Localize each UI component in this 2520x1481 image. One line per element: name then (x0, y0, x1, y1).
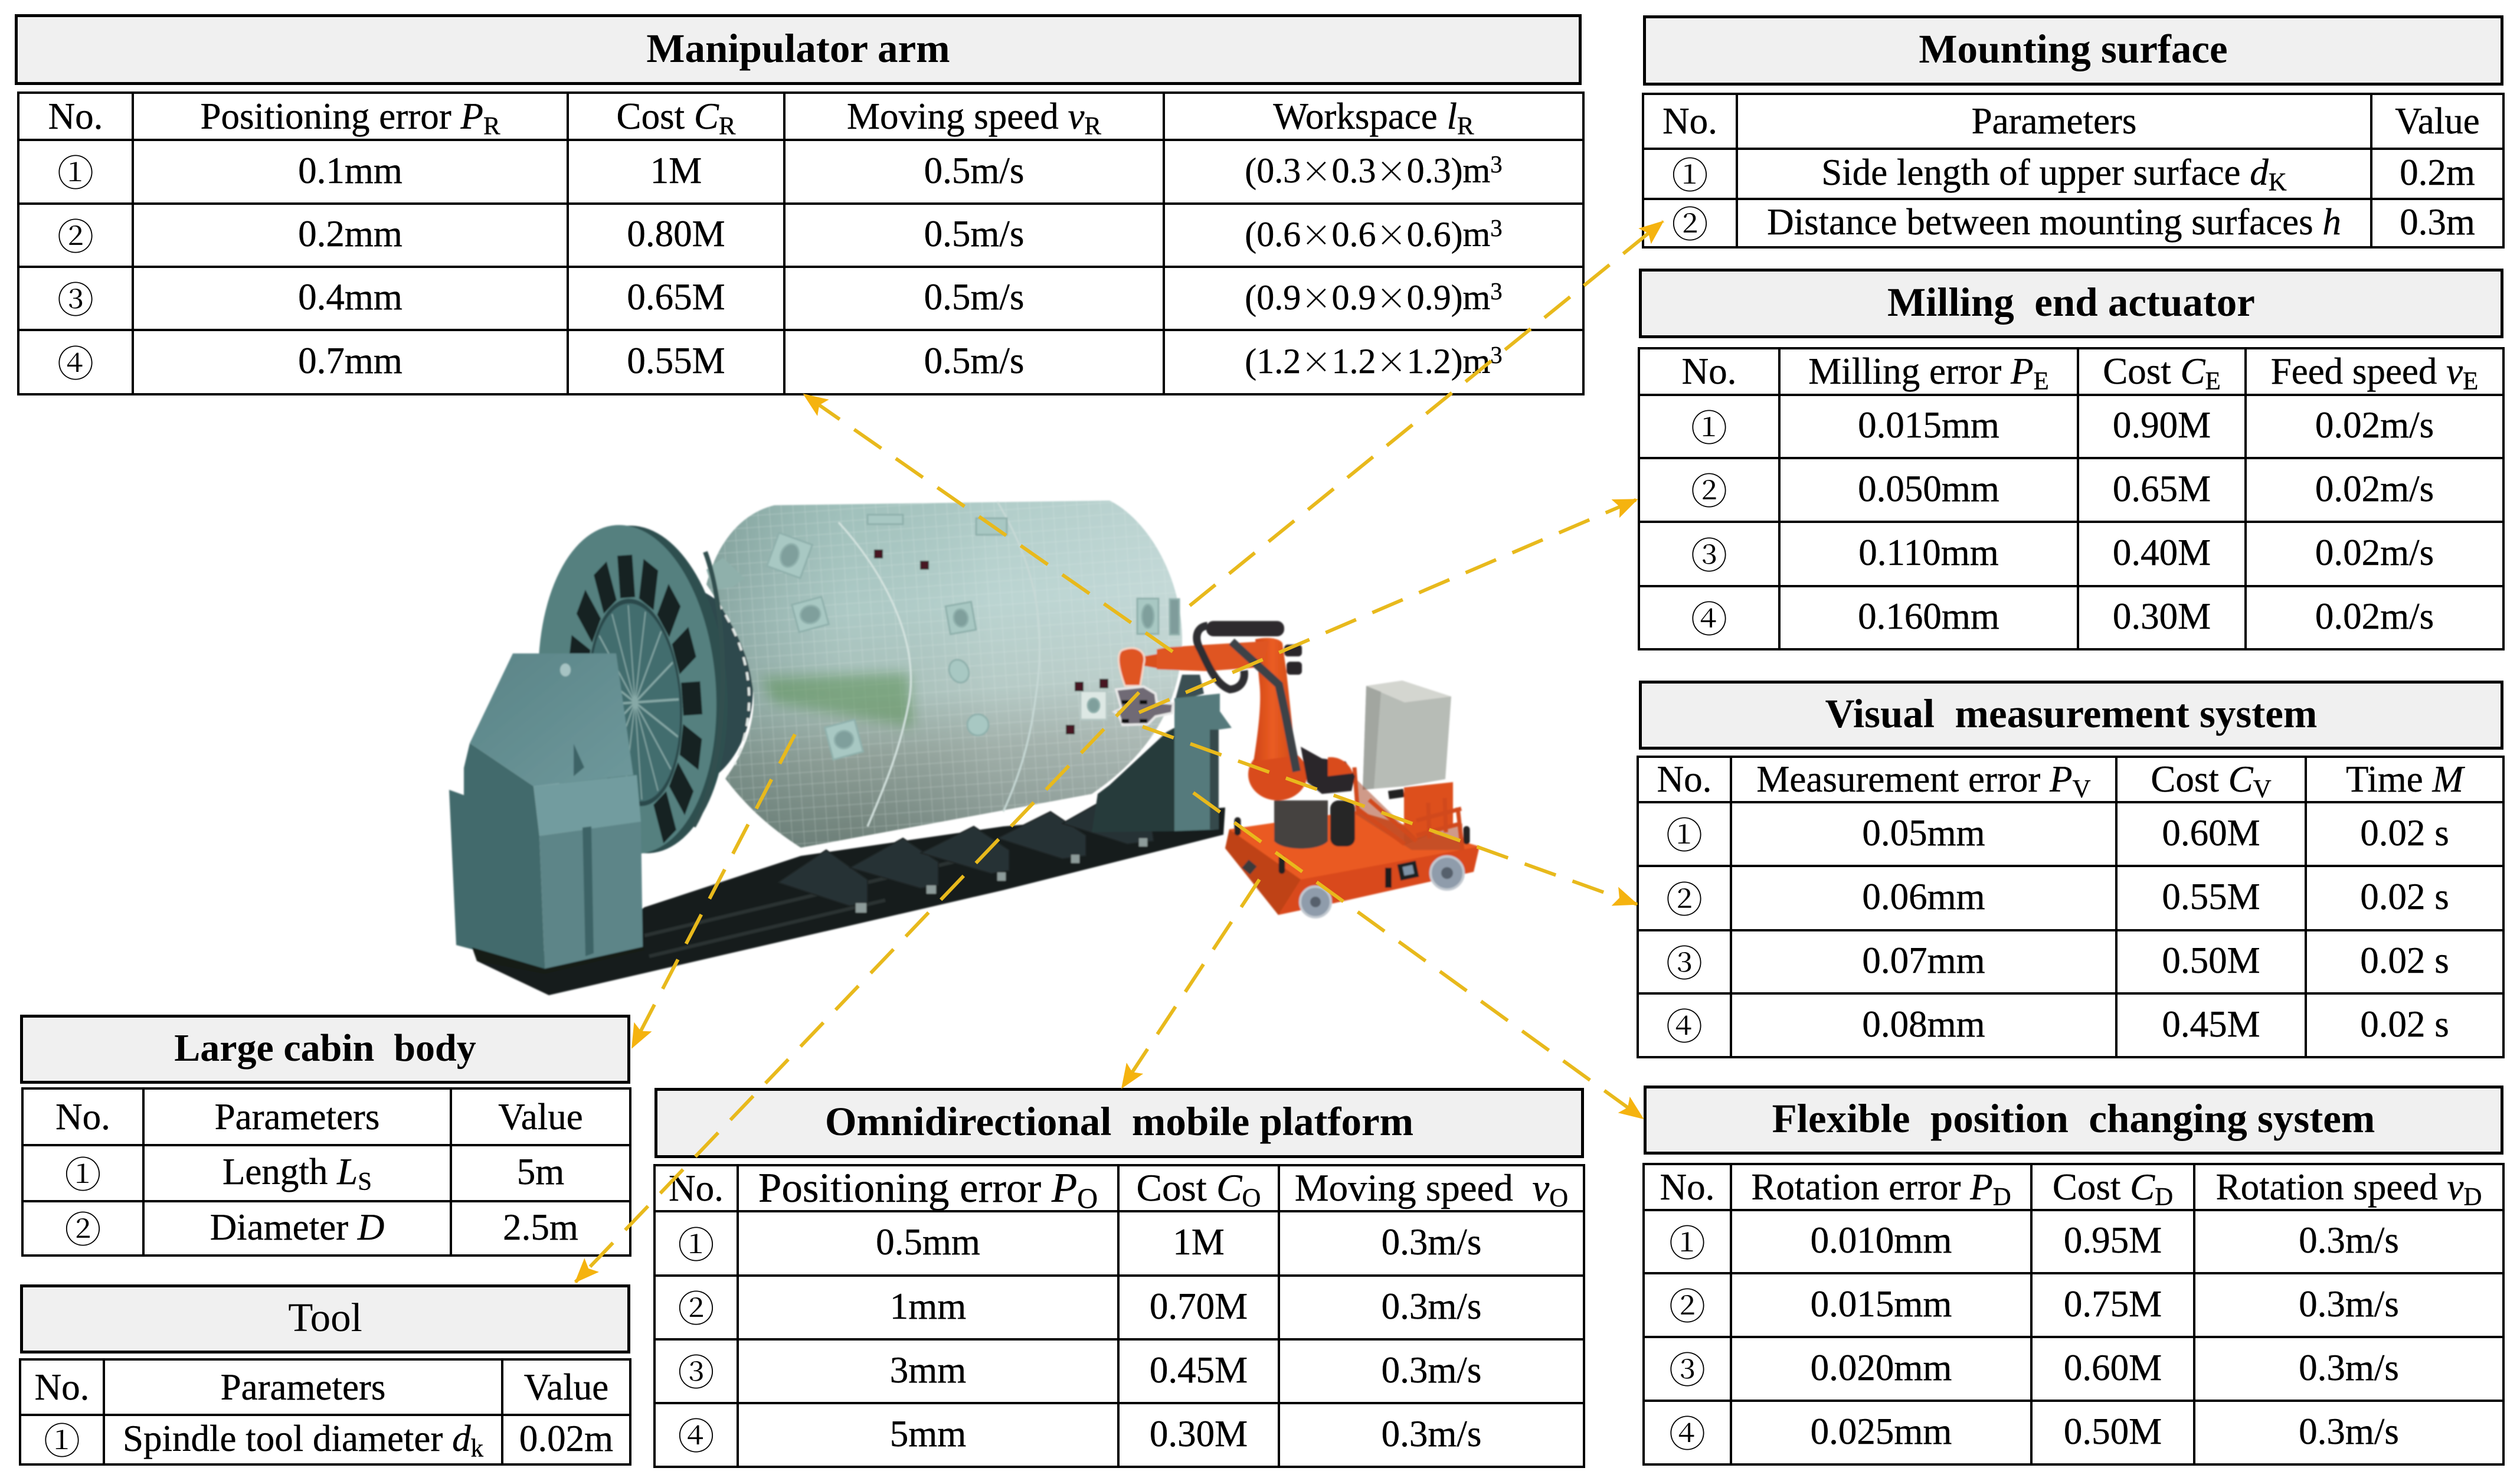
table: Omnidirectional mobile platform parameters: Moving speed vO (1295, 1166, 1568, 1212)
table: Manipulator arm parameters: 0.55M (627, 340, 725, 381)
rail base (477, 807, 1225, 995)
table: Manipulator arm parameters: ③ (57, 270, 94, 323)
table: Manipulator arm parameters: 1M (650, 150, 702, 191)
table: Visual measurement system parameters: 0.02 s (2360, 1003, 2449, 1045)
table: Mounting surface parameters: ② (1671, 195, 1708, 248)
electric cabinet (1363, 681, 1451, 799)
table: Manipulator arm parameters: Cost CR (617, 96, 735, 140)
arrow: to Mounting surface (1190, 221, 1663, 606)
table: Omnidirectional mobile platform parameters: 0.3m/s (1382, 1349, 1481, 1391)
table: Manipulator arm parameters: 0.5m/s (924, 150, 1024, 191)
table: Omnidirectional mobile platform parameters: 5mm (890, 1413, 966, 1454)
table: Flexible position changing system parameters: 0.020mm (1811, 1347, 1952, 1388)
table: Visual measurement system parameters: 0.45M (2162, 1003, 2260, 1045)
rotating flange disc (528, 519, 738, 860)
table: Milling end actuator parameters: Feed speed vE (2271, 351, 2478, 395)
table: Milling end actuator parameters: 0.40M (2113, 532, 2211, 573)
table: Omnidirectional mobile platform parameters: 0.70M (1150, 1286, 1248, 1327)
table: Milling end actuator parameters: 0.90M (2113, 404, 2211, 446)
table: Visual measurement system parameters: 0.07mm (1862, 940, 1985, 981)
mobile platform (1225, 811, 1480, 917)
arrow: to Flexible position changing system (1193, 793, 1643, 1119)
table: Omnidirectional mobile platform parameters: 0.3m/s (1382, 1286, 1481, 1327)
table: Visual measurement system parameters: No. (1657, 759, 1711, 800)
table: Mounting surface parameters: 0.3m (2400, 201, 2475, 242)
robot base column (1274, 800, 1355, 849)
heading: Large cabin body (20, 1015, 630, 1084)
panel: Tool (19, 1284, 631, 1466)
table: Manipulator arm parameters: 0.5m/s (924, 340, 1024, 381)
table: Manipulator arm parameters: (0.3×0.3×0.3)m3 (1245, 147, 1503, 191)
table: Flexible position changing system parameters: Rotation error PD (1751, 1166, 2011, 1211)
table: Visual measurement system parameters: 0.50M (2162, 940, 2260, 981)
table: Large cabin body parameters: ② (64, 1201, 102, 1253)
table: Flexible position changing system parameters: 0.60M (2064, 1347, 2162, 1388)
table: Manipulator arm parameters (17, 91, 1585, 395)
heading: Large cabin body: Large cabin body (174, 1026, 476, 1070)
table: Mounting surface parameters: No. (1662, 100, 1717, 142)
table: Flexible position changing system parameters: 0.3m/s (2299, 1347, 2399, 1388)
table: Manipulator arm parameters: ④ (57, 334, 94, 387)
table: Visual measurement system parameters: 0.02 s (2360, 876, 2449, 917)
table: Tool parameters (19, 1358, 631, 1466)
table: Manipulator arm parameters: 0.2mm (298, 213, 402, 254)
table: Large cabin body parameters: ① (64, 1145, 102, 1198)
left support pedestal (449, 653, 644, 974)
table: Flexible position changing system parameters: 0.50M (2064, 1411, 2162, 1452)
table: Milling end actuator parameters: Cost CE (2103, 351, 2221, 395)
table: Tool parameters: Value (524, 1366, 608, 1407)
large cabin body (706, 501, 1182, 848)
table: Flexible position changing system parameters: ② (1669, 1277, 1706, 1330)
table: Manipulator arm parameters: ① (57, 144, 94, 197)
heading: Omnidirectional mobile platform (654, 1088, 1584, 1158)
table: Manipulator arm parameters: ② (57, 208, 94, 260)
table: Omnidirectional mobile platform parameters: 1mm (890, 1286, 966, 1327)
table: Flexible position changing system parameters: 0.025mm (1811, 1411, 1952, 1452)
table: Manipulator arm parameters: (0.9×0.9×0.9)m3 (1245, 274, 1503, 318)
table: Flexible position changing system parameters: 0.75M (2064, 1283, 2162, 1325)
table: Mounting surface parameters: Parameters (1972, 100, 2136, 142)
table: Tool parameters: No. (35, 1366, 89, 1407)
heading: Tool: Tool (288, 1295, 362, 1340)
table: Tool parameters: Spindle tool diameter dk (123, 1418, 483, 1462)
table: Visual measurement system parameters: Measurement error PV (1756, 759, 2091, 803)
panel: Omnidirectional mobile platform (653, 1088, 1585, 1468)
table: Milling end actuator parameters: 0.110mm (1858, 532, 1999, 573)
scissor saddle supports (778, 797, 1154, 913)
arrow: to Manipulator arm (804, 394, 1173, 652)
table: Manipulator arm parameters: 0.1mm (298, 150, 402, 191)
table: Manipulator arm parameters: Workspace lR (1273, 96, 1474, 140)
table: Milling end actuator parameters: ② (1691, 462, 1727, 515)
table: Visual measurement system parameters: 0.08mm (1862, 1003, 1985, 1045)
table: Tool parameters: Parameters (221, 1366, 385, 1407)
table: Omnidirectional mobile platform parameters: No. (669, 1168, 724, 1209)
table: Milling end actuator parameters: 0.160mm (1858, 596, 1999, 637)
panel: Mounting surface (1642, 15, 2505, 249)
panel: Visual measurement system (1637, 681, 2505, 1058)
table: Manipulator arm parameters: (0.6×0.6×0.6)m3 (1245, 210, 1503, 255)
table: Omnidirectional mobile platform parameters: ③ (678, 1343, 714, 1396)
panel: Milling end actuator (1638, 269, 2505, 650)
table: Omnidirectional mobile platform parameters (653, 1164, 1585, 1468)
table: Visual measurement system parameters: ④ (1666, 998, 1703, 1050)
table: Omnidirectional mobile platform parameters: 1M (1173, 1221, 1225, 1263)
table: Omnidirectional mobile platform parameters: 0.45M (1150, 1349, 1248, 1391)
arrow: to Tool (575, 692, 1139, 1282)
table: Flexible position changing system parameters: No. (1660, 1166, 1714, 1208)
table: Visual measurement system parameters: Time M (2346, 759, 2463, 800)
table: Manipulator arm parameters: 0.4mm (298, 276, 402, 318)
table: Omnidirectional mobile platform parameters: ④ (678, 1407, 714, 1460)
heading: Manipulator arm: Manipulator arm (646, 26, 950, 71)
table: Visual measurement system parameters: 0.05mm (1862, 812, 1985, 854)
table: Visual measurement system parameters: ② (1666, 870, 1703, 923)
table: Milling end actuator parameters: ④ (1691, 590, 1727, 642)
table: Visual measurement system parameters (1637, 756, 2505, 1058)
table: Omnidirectional mobile platform parameters: Cost CO (1137, 1166, 1261, 1212)
red markers on cabin (875, 550, 1108, 734)
table: Flexible position changing system parameters: 0.3m/s (2299, 1411, 2399, 1452)
right support pedestal (1092, 675, 1232, 832)
arrow: to Milling end actuator (1139, 499, 1637, 712)
table: Flexible position changing system parameters: 0.015mm (1811, 1283, 1952, 1325)
back motors (1284, 645, 1302, 675)
table: Flexible position changing system parameters: 0.3m/s (2299, 1283, 2399, 1325)
heading: Tool (20, 1284, 630, 1354)
illustration: cabin body and mobile milling robot (448, 499, 1480, 996)
table: Flexible position changing system parameters: 0.95M (2064, 1220, 2162, 1261)
table: Manipulator arm parameters: No. (48, 96, 103, 137)
heading: Visual measurement system: Visual measurement system (1825, 691, 2317, 736)
table: Omnidirectional mobile platform parameters: 0.5mm (876, 1221, 980, 1263)
table: Milling end actuator parameters: 0.02m/s (2315, 404, 2434, 446)
table: Manipulator arm parameters: Positioning error PR (200, 96, 500, 140)
table: Milling end actuator parameters: ③ (1691, 527, 1727, 578)
table: Omnidirectional mobile platform parameters: ② (678, 1280, 714, 1332)
table: Manipulator arm parameters: (1.2×1.2×1.2)m3 (1245, 338, 1503, 381)
table: Manipulator arm parameters: 0.80M (627, 213, 725, 254)
table: Large cabin body parameters: 5m (517, 1151, 564, 1192)
table: Visual measurement system parameters: Cost CV (2151, 759, 2272, 803)
table: Omnidirectional mobile platform parameters: 0.3m/s (1382, 1221, 1481, 1263)
table: Visual measurement system parameters: 0.60M (2162, 812, 2260, 854)
table: Milling end actuator parameters: ① (1691, 399, 1727, 451)
table: Flexible position changing system parameters: ④ (1669, 1405, 1706, 1457)
table: Flexible position changing system parameters: 0.3m/s (2299, 1220, 2399, 1261)
table: Visual measurement system parameters: 0.06mm (1862, 876, 1985, 917)
table: Milling end actuator parameters: No. (1682, 351, 1736, 392)
table: Flexible position changing system parameters (1642, 1163, 2505, 1466)
heading: Mounting surface (1643, 15, 2503, 86)
table: Visual measurement system parameters: ① (1666, 806, 1703, 859)
table: Omnidirectional mobile platform parameters: Positioning error PO (758, 1165, 1098, 1214)
table: Milling end actuator parameters: 0.02m/s (2315, 596, 2434, 637)
safety guard rails (1354, 767, 1462, 850)
table: Visual measurement system parameters: ③ (1666, 934, 1703, 987)
heading: Omnidirectional mobile platform: Omnidirectional mobile platform (825, 1099, 1413, 1144)
table: Large cabin body parameters (21, 1087, 631, 1257)
table: Flexible position changing system parameters: Cost CD (2053, 1166, 2173, 1211)
table: Flexible position changing system parameters: ① (1669, 1214, 1706, 1267)
heading: Mounting surface: Mounting surface (1919, 27, 2228, 71)
milling end actuator (1114, 686, 1173, 725)
table: Large cabin body parameters: No. (55, 1096, 110, 1137)
table: Milling end actuator parameters: 0.02m/s (2315, 532, 2434, 573)
heading: Flexible position changing system (1644, 1086, 2503, 1155)
table: Visual measurement system parameters: 0.02 s (2360, 940, 2449, 981)
table: Omnidirectional mobile platform parameters: 3mm (890, 1349, 966, 1391)
heading: Flexible position changing system: Flexible position changing system (1772, 1096, 2375, 1141)
table: Flexible position changing system parameters: ③ (1669, 1341, 1706, 1394)
table: Milling end actuator parameters: 0.02m/s (2315, 467, 2434, 509)
table: Omnidirectional mobile platform parameters: ① (678, 1216, 714, 1268)
table: Mounting surface parameters: Value (2395, 100, 2480, 142)
table: Flexible position changing system parameters: Rotation speed vD (2216, 1166, 2482, 1211)
mounting bosses on cabin (767, 515, 1179, 760)
panel: Flexible position changing system (1642, 1086, 2505, 1466)
table: Mounting surface parameters: Side length of upper surface dK (1821, 152, 2287, 196)
arrow: to Visual measurement system (1143, 727, 1637, 904)
panel: Manipulator arm (15, 14, 1585, 395)
table: Mounting surface parameters: ① (1671, 146, 1708, 198)
table: Milling end actuator parameters: 0.015mm (1858, 404, 1999, 446)
heading: Milling end actuator (1639, 269, 2503, 338)
table: Visual measurement system parameters: 0.02 s (2360, 812, 2449, 854)
table: Tool parameters: 0.02m (519, 1418, 613, 1459)
neck ring between flange and cabin (604, 586, 753, 789)
heading: Manipulator arm (15, 14, 1582, 85)
table: Large cabin body parameters: 2.5m (503, 1207, 578, 1248)
table: Milling end actuator parameters: 0.65M (2113, 467, 2211, 509)
table: Milling end actuator parameters: 0.30M (2113, 596, 2211, 637)
table: Large cabin body parameters: Value (498, 1096, 583, 1137)
heading: Visual measurement system (1639, 681, 2503, 750)
table: Manipulator arm parameters: 0.5m/s (924, 276, 1024, 318)
table: Visual measurement system parameters: 0.55M (2162, 876, 2260, 917)
panel: Large cabin body (20, 1015, 631, 1257)
table: Large cabin body parameters: Parameters (215, 1096, 379, 1137)
heading: Milling end actuator: Milling end actuator (1887, 280, 2255, 325)
table: Omnidirectional mobile platform parameters: 0.30M (1150, 1413, 1248, 1454)
table: Milling end actuator parameters (1638, 347, 2505, 650)
arrow: to Large cabin body (632, 734, 795, 1048)
table: Omnidirectional mobile platform parameters: 0.3m/s (1382, 1413, 1481, 1454)
arm cable hose (1197, 621, 1297, 771)
robot arm (1118, 638, 1307, 800)
table: Manipulator arm parameters: 0.7mm (298, 340, 402, 381)
table: Manipulator arm parameters: Moving speed vR (847, 96, 1101, 140)
table: Manipulator arm parameters: 0.5m/s (924, 213, 1024, 254)
table: Large cabin body parameters: Diameter D (210, 1207, 384, 1248)
table: Large cabin body parameters: Length LS (222, 1151, 372, 1195)
table: Mounting surface parameters: Distance between mounting surfaces h (1767, 201, 2341, 242)
table: Mounting surface parameters (1642, 93, 2505, 249)
arrow: to Omnidirectional mobile platform (1122, 880, 1259, 1088)
table: Manipulator arm parameters: 0.65M (627, 276, 725, 318)
shoulder motor group (1301, 747, 1355, 794)
table: Flexible position changing system parameters: 0.010mm (1811, 1220, 1952, 1261)
table: Mounting surface parameters: 0.2m (2400, 152, 2475, 193)
table: Milling end actuator parameters: 0.050mm (1858, 467, 1999, 509)
table: Tool parameters: ① (44, 1412, 80, 1464)
table: Milling end actuator parameters: Milling error PE (1808, 351, 2049, 395)
